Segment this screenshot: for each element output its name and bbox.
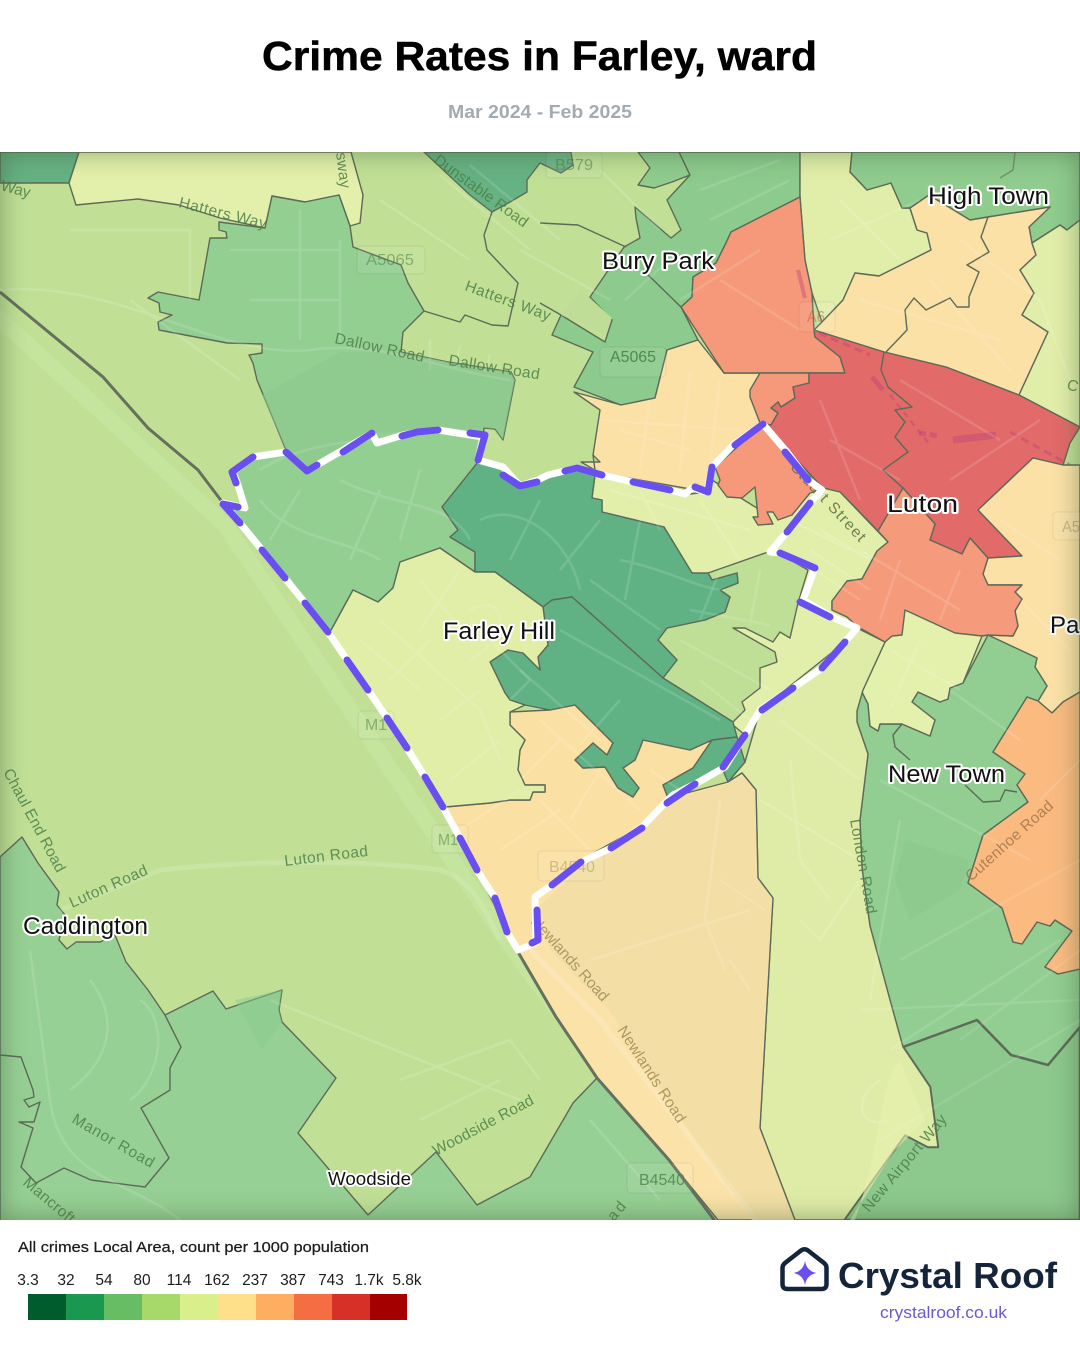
icon: house with star — [782, 1249, 826, 1289]
road shields: B579 — [555, 157, 593, 174]
road labels: Luton Road — [67, 862, 150, 912]
region: Dallow green, west ward — [148, 195, 515, 632]
region: Luton salmon north — [681, 197, 845, 373]
legend scale values: 54 — [95, 1272, 113, 1289]
place labels: Farley Hill — [443, 618, 555, 645]
region: Luton centre red — [763, 330, 1080, 558]
region: east ward pale yellow — [592, 475, 888, 735]
place labels: Pa — [1050, 612, 1080, 639]
region: Bury Park green — [552, 152, 800, 405]
road labels: sway — [332, 151, 353, 189]
region: top small green — [638, 152, 690, 188]
boundary high town lines — [886, 217, 989, 352]
road shields: M1 — [365, 717, 387, 734]
boundary: Manor Road area — [0, 1015, 181, 1187]
region: east pale yellow — [1019, 220, 1080, 427]
region: south east green — [844, 1020, 1080, 1220]
header — [262, 33, 817, 122]
legend — [17, 1239, 422, 1320]
road labels: Dunstable Road — [431, 151, 531, 231]
legend scale values: 3.3 — [17, 1272, 39, 1289]
legend scale values: 743 — [318, 1272, 344, 1289]
road shields — [357, 152, 1080, 1193]
region: High Town pale orange — [814, 195, 1050, 395]
road shields: B4540 — [549, 859, 595, 876]
place labels — [23, 183, 1080, 1189]
road shields: M1 — [438, 832, 458, 849]
subtitle: date range: Mar 2024 - Feb 2025 — [448, 101, 632, 122]
region: ward dark green north — [442, 462, 738, 678]
region: ward dark green south — [490, 597, 737, 797]
legend scale values: 114 — [167, 1272, 192, 1289]
region: tan farmland — [752, 896, 794, 1220]
place labels: Woodside — [328, 1168, 411, 1189]
website link: crystalroof.co.uk — [880, 1304, 1008, 1322]
road labels: Newlands Road — [527, 913, 612, 1005]
road labels: Woodside Road — [430, 1092, 537, 1160]
road labels: Cutenhoe Road — [962, 797, 1057, 885]
region: Bury Park south pale orange — [574, 340, 763, 492]
road shields: A6 — [807, 309, 825, 326]
legend scale values: 387 — [280, 1272, 306, 1289]
area boundary lines — [424, 152, 1015, 470]
rail lines through centre — [798, 270, 1070, 465]
region: top pale strip — [69, 152, 363, 228]
road labels: Chaul End Road — [0, 766, 68, 875]
boundary inside red area — [881, 352, 912, 488]
logo: Crystal Roof — [780, 1247, 1058, 1322]
place labels: High Town — [928, 183, 1049, 210]
legend scale values: 80 — [133, 1272, 151, 1289]
legend colour bar — [28, 1294, 407, 1320]
region: Cutenhoe orange — [968, 692, 1080, 974]
road shields: B4540 — [639, 1172, 685, 1189]
wordmark: Crystal Roof — [838, 1255, 1058, 1296]
region: tan / Newlands pale orange — [518, 773, 795, 1220]
region: top dark green Dunstable Road — [424, 152, 573, 212]
region: New Town and east green — [857, 635, 1080, 1065]
region: ward salmon — [715, 424, 822, 525]
road shields: A5065 — [610, 349, 656, 366]
road shields: A5065 — [366, 252, 414, 269]
map edge vignette — [0, 152, 1080, 1220]
place labels: New Town — [888, 761, 1005, 788]
region: Farley Hill pale yellow — [330, 548, 548, 807]
legend scale values: 5.8k — [392, 1272, 422, 1289]
legend scale values: 162 — [204, 1272, 230, 1289]
legend title: All crimes Local Area, count per 1000 population — [18, 1239, 369, 1256]
region: London Road pale yellow — [728, 628, 938, 1220]
road labels: Manor Road — [69, 1111, 157, 1171]
road labels: Luton Road — [283, 843, 369, 870]
region: ward dark green strip — [663, 737, 745, 798]
region: top-left dark green — [0, 152, 79, 183]
region: Park pale orange — [978, 458, 1080, 713]
legend scale values: 32 — [57, 1272, 75, 1289]
place labels: Bury Park — [602, 248, 715, 275]
motorway M1 boundary — [0, 292, 718, 1225]
base area: light green — [0, 152, 1080, 1220]
place labels: Luton — [887, 491, 958, 518]
road labels: Hatters Way — [463, 278, 553, 325]
streets — [0, 160, 1080, 1225]
legend scale values: 1.7k — [354, 1272, 384, 1289]
region: east pale yellow New Town north — [862, 610, 982, 736]
region: Farley south pale orange — [445, 705, 712, 952]
ward boundary: Farley — [223, 424, 857, 950]
region: ward east lighter green — [658, 552, 808, 722]
region: south west green — [0, 837, 718, 1225]
region: salmon south of Luton — [832, 488, 1022, 642]
region: High Town green — [850, 152, 1080, 243]
legend scale values: 237 — [242, 1272, 268, 1289]
legend scale values — [17, 1272, 422, 1289]
road labels: London Road — [846, 818, 879, 915]
road labels: Newlands Road — [614, 1023, 689, 1126]
place labels: Caddington — [23, 913, 148, 940]
region: salmon small — [750, 373, 809, 425]
title: Crime Rates in Farley, ward — [262, 33, 817, 79]
road labels: Hatters Way — [177, 194, 269, 233]
region: top centre pale yellow — [800, 152, 931, 322]
road labels: Dallow Road — [333, 330, 426, 366]
map: crime rate choropleth — [0, 152, 1080, 1220]
road labels: New Airport Way — [859, 1111, 951, 1216]
road labels: Dallow Road — [447, 352, 541, 383]
road labels: Stuart Street — [787, 459, 870, 546]
